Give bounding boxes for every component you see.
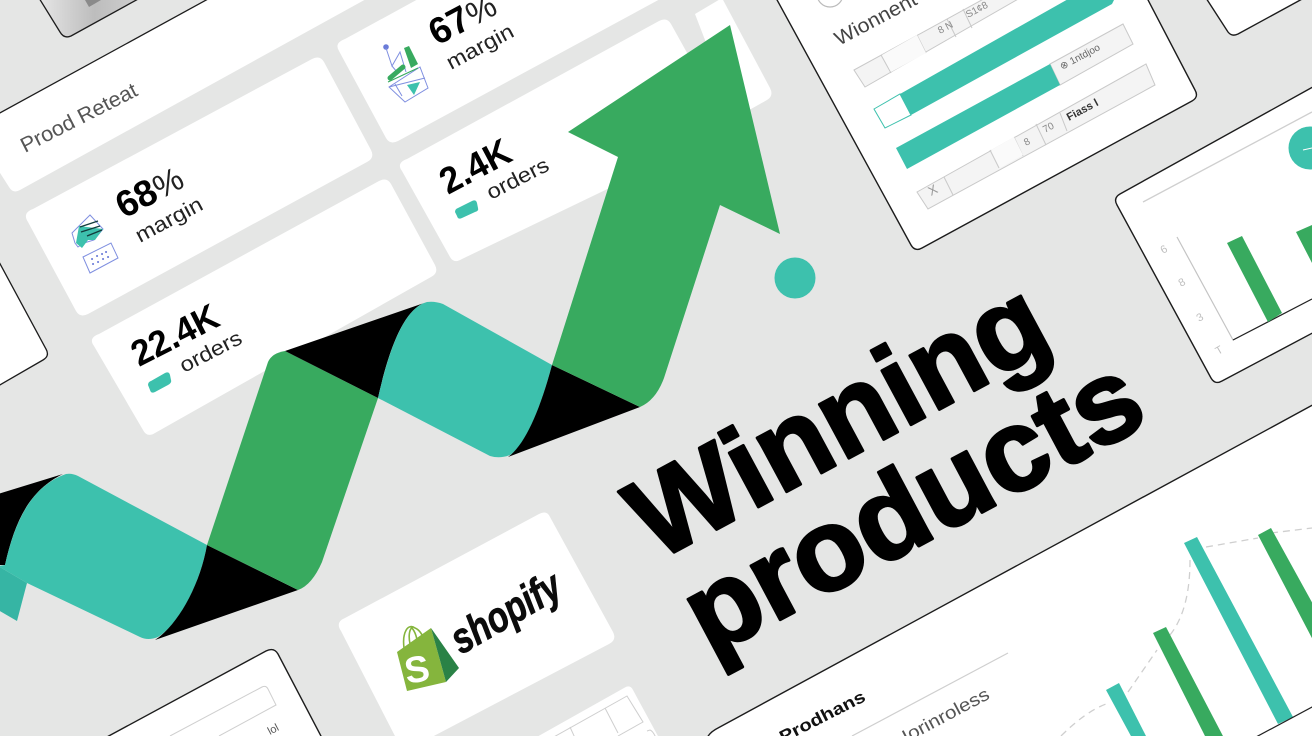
title line 1: Winning (606, 254, 1068, 584)
card: 68% margin (26, 58, 372, 315)
icon: shopify bag (397, 627, 459, 692)
ribbon: fourth black fold (508, 365, 640, 457)
ribbon: first teal segment (0, 474, 207, 639)
title line 2: products (661, 330, 1163, 679)
ribbon: first green segment (207, 351, 378, 590)
panel: product report (0, 0, 368, 191)
row 4: table cells: 8 (1022, 136, 1033, 149)
row 4: table cells: X (925, 181, 940, 199)
icon: circle badge (817, 0, 843, 7)
ribbon: first black fold (0, 474, 63, 565)
dot: teal accent (774, 258, 816, 298)
axis labels: T (1214, 344, 1226, 358)
icon: shopify bag: S (401, 647, 433, 692)
panel: winners table (776, 0, 1196, 249)
row 3: progress bar with label (896, 24, 1133, 169)
row 3: progress bar with label: ⊗ 1ntdjoo (1058, 42, 1103, 73)
icon: basket with plant (383, 44, 428, 102)
panel: right bar chart (1116, 83, 1312, 382)
text: report heading: Prood Reteat (17, 79, 141, 157)
ribbon: third black fold (285, 302, 427, 398)
ribbon: far left fold (0, 566, 27, 621)
icon: teal circle (1288, 126, 1312, 170)
legend pill (148, 372, 171, 393)
row 1: table cells: S1¢8 (964, 0, 990, 21)
ribbon: second black fold (155, 545, 298, 640)
panel: left edge card (0, 260, 47, 386)
label: margin: margin (443, 20, 518, 74)
row 4: table cells: Fiass l (1065, 97, 1101, 124)
card: 2.4K orders (400, 20, 730, 261)
legend pill (455, 200, 478, 219)
panel: top-left grey card (39, 0, 140, 37)
panel: bottom-right chart (707, 401, 1312, 736)
panel: top-right card (1206, 0, 1304, 35)
icon: stacked box and keypad (72, 215, 118, 273)
row 2: progress bar (874, 0, 1115, 128)
axis labels (1158, 243, 1226, 358)
axis labels: 3 (1194, 311, 1206, 325)
trend line (1061, 528, 1312, 736)
card: 22.4K orders (92, 180, 436, 435)
row 1: table cells: 8 N (936, 20, 955, 37)
chart bars (1227, 225, 1312, 322)
chart baseline (1256, 706, 1312, 736)
ribbon: green arrow head and shaft (552, 25, 780, 407)
chart axis (1177, 237, 1312, 340)
metric: 22.4K: 22.4K (124, 295, 225, 374)
row 4: table cells (917, 64, 1155, 209)
title (606, 254, 1163, 679)
ribbon: second teal segment (378, 302, 552, 457)
axis labels: 6 (1158, 243, 1170, 257)
row 4: table cells: 70 (1041, 121, 1057, 136)
card: 67% margin (337, 0, 662, 142)
label: orders: orders (483, 154, 553, 204)
metric: 2.4K: 2.4K (433, 131, 518, 202)
card: lower grid card (535, 686, 659, 736)
panel: bottom-left form card (105, 650, 322, 736)
chart ribbon arrow (0, 25, 780, 640)
card: partially hidden behind arrow (695, 0, 771, 118)
chart bars (1106, 528, 1312, 736)
axis labels: 8 (1176, 276, 1188, 290)
row 1: table cells (854, 0, 1020, 87)
logo text: shopify: shopify (442, 561, 571, 664)
metric: 68%: 68% (109, 157, 190, 226)
card: shopify logo (339, 513, 614, 736)
label: orders: orders (176, 327, 246, 377)
label: margin: margin (132, 193, 207, 247)
